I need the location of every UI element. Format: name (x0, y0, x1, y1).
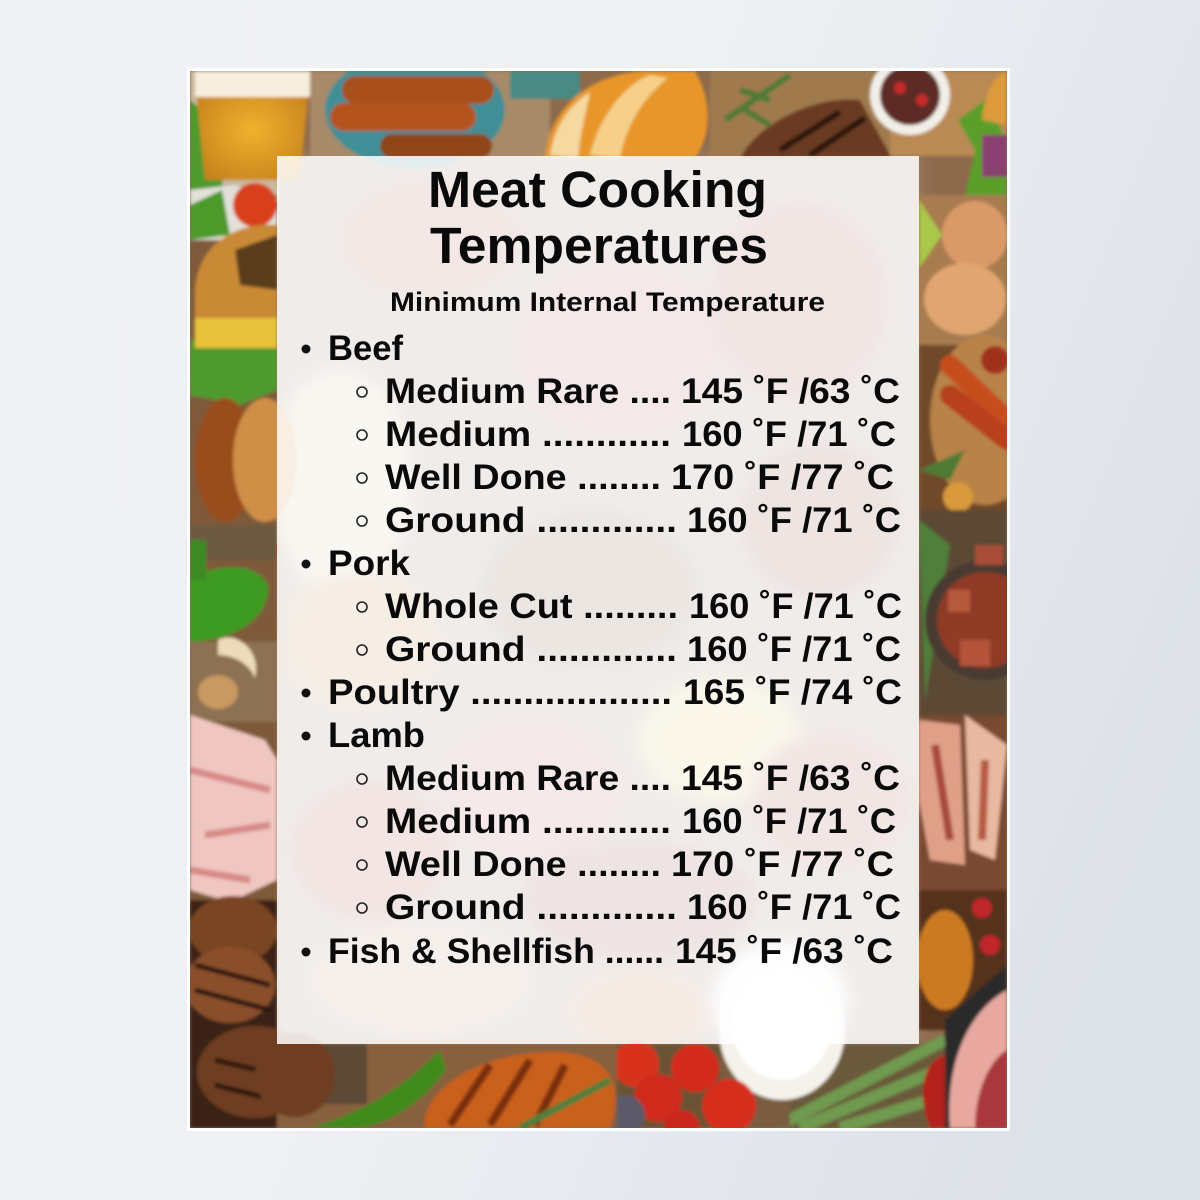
lamb medium rare: 145 ˚F /63 ˚C (681, 759, 900, 798)
pork whole cut (357, 587, 902, 626)
lamb ground: 160 ˚F /71 ˚C (687, 888, 901, 927)
beef ground: Ground ............. (385, 501, 677, 540)
subtitle: Minimum Internal Temperature (390, 287, 825, 317)
bread loaf (510, 71, 708, 158)
bottom-right raw meat and herbs (780, 965, 1007, 1128)
lamb well done: 170 ˚F /77 ˚C (671, 845, 894, 884)
lower side dark (190, 525, 277, 560)
beef medium: Medium ............ (385, 415, 671, 454)
beef well done: Well Done ........ (385, 458, 661, 497)
fish and shellfish: Fish & Shellfish ...... (328, 932, 664, 971)
pork whole cut: Whole Cut ......... (385, 587, 678, 626)
wood board with sausages (919, 335, 1040, 512)
beef medium: 160 ˚F /71 ˚C (682, 415, 896, 454)
lime and eggs (919, 195, 1008, 345)
spice bowl (867, 71, 1007, 158)
bacon slices (919, 715, 1007, 905)
title: Temperatures (430, 217, 768, 274)
ham slices (190, 715, 277, 902)
lamb well done: Well Done ........ (385, 845, 661, 884)
grilled steaks (190, 900, 277, 1128)
lamb medium rare: Medium Rare .... (385, 759, 671, 798)
tomato and lettuce (190, 185, 277, 240)
tomato small (275, 543, 277, 557)
pork whole cut: 160 ˚F /71 ˚C (689, 587, 902, 626)
food photo collage (185, 52, 1045, 1146)
green chili (310, 1050, 446, 1128)
temperature list (302, 329, 902, 971)
right bowl of meat (919, 510, 1045, 720)
lamb medium: Medium ............ (385, 802, 671, 841)
lamb medium (357, 802, 896, 841)
pork ground: Ground ............. (385, 630, 677, 669)
grilled steak and herbs (710, 71, 892, 161)
fish and shellfish (302, 932, 893, 971)
beef ground (357, 501, 901, 540)
photo food items softened (185, 52, 1045, 1146)
cherry tomatoes (610, 1042, 758, 1128)
lamb well done (357, 845, 894, 884)
beef medium rare (357, 372, 900, 411)
poultry: Poultry ................... (328, 673, 672, 712)
dip bowl (717, 1022, 847, 1128)
side background (190, 195, 277, 915)
lamb medium: 160 ˚F /71 ˚C (682, 802, 896, 841)
beef medium rare: 145 ˚F /63 ˚C (681, 372, 900, 411)
lamb ground: Ground ............. (385, 888, 677, 927)
lamb medium rare (357, 759, 900, 798)
green bell pepper (190, 567, 268, 642)
top-right burger (958, 72, 1007, 205)
cashew and mushrooms (190, 642, 277, 722)
beef well done: 170 ˚F /77 ˚C (671, 458, 894, 497)
poultry (302, 673, 902, 712)
beef medium (357, 415, 896, 454)
top sausages on plate (308, 71, 552, 168)
lamb heading: Lamb (328, 716, 425, 755)
roast chicken (194, 396, 244, 522)
lamb ground (357, 888, 901, 927)
pork ground (357, 630, 901, 669)
left food column (185, 183, 367, 1128)
poster white frame (187, 68, 1010, 1131)
collage base tone (190, 71, 1007, 1128)
translucent white text panel (277, 156, 919, 1044)
beef well done (357, 458, 894, 497)
roasted sausage with rosemary (277, 1044, 617, 1128)
beef ground: 160 ˚F /71 ˚C (687, 501, 901, 540)
beef heading: Beef (328, 329, 403, 368)
title: Meat Cooking (428, 161, 767, 218)
fish and shellfish: 145 ˚F /63 ˚C (675, 932, 893, 971)
faded centre food (270, 156, 919, 1055)
beef medium rare: Medium Rare .... (385, 372, 671, 411)
burger (190, 340, 277, 405)
orange and red berries (917, 890, 1007, 1030)
pork ground: 160 ˚F /71 ˚C (687, 630, 901, 669)
pork heading: Pork (328, 544, 411, 583)
title (428, 161, 768, 274)
poultry: 165 ˚F /74 ˚C (683, 673, 902, 712)
top-left beer and greens (190, 71, 310, 201)
